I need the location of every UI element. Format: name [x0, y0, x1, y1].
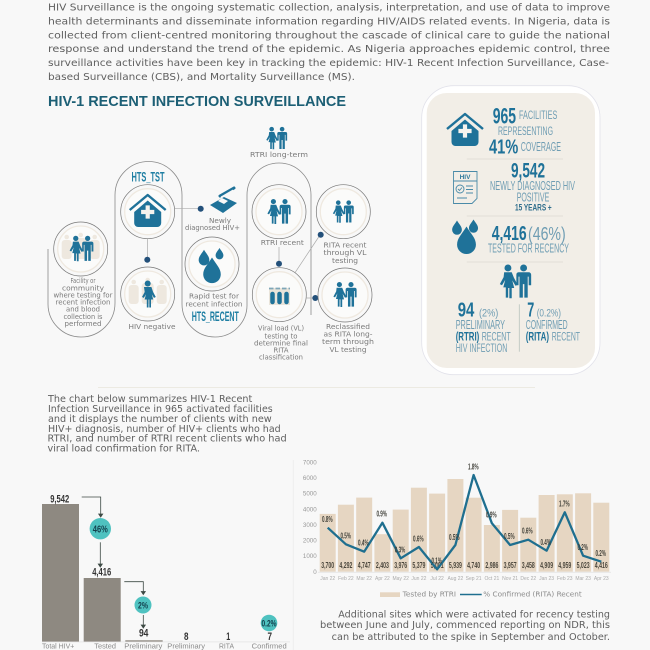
month labels: Apr 22 — [375, 576, 390, 582]
bar values: 4,959 — [558, 561, 572, 570]
stat: preliminary RTRI recent: HIV INFECTION — [456, 341, 507, 355]
bar values: 4,747 — [358, 561, 371, 570]
legend: Tested by RTRI — [402, 590, 456, 598]
y axis labels — [303, 460, 317, 576]
intro text block: collected from client-centred monitoring throughout the cascade of clinical care to guide the national — [48, 30, 610, 42]
percent labels: 0.3% — [395, 546, 405, 555]
intro text block: surveillance activities have been key in tracking the epidemic: HIV-1 Recent Infection Surveillance, Case- — [48, 58, 609, 69]
node: facility or community: recent infection — [56, 298, 110, 307]
node: rapid test: Rapid test for — [189, 292, 239, 300]
month labels: Mar 22 — [356, 576, 372, 582]
icon: couple — [500, 265, 531, 298]
bar values: 1 — [226, 631, 230, 643]
month labels: Jun 22 — [411, 576, 427, 582]
bar values: 5,939 — [449, 561, 462, 570]
stat: preliminary RTRI recent: (2%) — [479, 308, 498, 320]
node: HIV negative: HIV negative — [128, 322, 176, 331]
stat: facilities: REPRESENTING — [498, 124, 553, 138]
label: HTS_RECENT: HTS_RECENT — [192, 308, 239, 324]
y axis labels: 6000 — [303, 475, 317, 482]
label: newly diagnosed HIV+: diagnosed HIV+ — [185, 223, 240, 232]
node: reclassified as RITA long-term: as RITA long- — [324, 330, 373, 338]
bar values — [321, 561, 608, 570]
node: facility or community: Facility or — [70, 276, 96, 285]
y axis labels: 1000 — [303, 553, 317, 560]
bar values — [50, 494, 272, 643]
node: facility or community: and blood — [66, 305, 100, 314]
monthly bars — [320, 479, 609, 572]
intro text block: HIV Surveillance is the ongoing systematic collection, analysis, interpretation, and use of data to improve — [48, 2, 610, 14]
chart description text — [47, 394, 287, 454]
percent labels: 0.6% — [413, 534, 424, 543]
intro text block — [48, 2, 610, 83]
connector dots — [144, 206, 324, 301]
stat: newly diagnosed: 15 YEARS + — [515, 203, 552, 213]
month labels: Jan 23 — [539, 576, 554, 582]
stat: preliminary RTRI recent: PRELIMINARY — [456, 318, 505, 332]
stat: preliminary RTRI recent — [456, 300, 511, 355]
bar values: 4,416 — [595, 561, 608, 570]
month labels: Apr 23 — [594, 576, 609, 582]
stat: preliminary RTRI recent: 94 — [458, 300, 475, 322]
bar values: 2,403 — [376, 561, 389, 570]
percent confirmed trend line — [328, 475, 601, 569]
node: facility or community: community — [62, 284, 105, 292]
percent labels: 0.2% — [577, 543, 588, 552]
percent labels: 0.9% — [376, 509, 387, 518]
node: viral load testing: testing to — [264, 332, 298, 340]
stat: tested for recency: TESTED FOR RECENCY — [488, 241, 569, 256]
bar values: 5,001 — [431, 561, 444, 570]
node: rapid test: recent infection — [186, 300, 242, 308]
stat: newly diagnosed: POSITIVE — [517, 190, 549, 205]
node: RITA recent — [316, 185, 370, 265]
y axis labels: 5000 — [303, 491, 317, 498]
stat: newly diagnosed: 9,542 — [511, 160, 545, 183]
chart description text: HIV+ diagnosis, number of HIV+ clients who had — [48, 424, 281, 435]
stat: preliminary RTRI recent: (RTRI) — [456, 329, 479, 343]
month labels: Jul 22 — [430, 576, 444, 582]
combo chart: tested by RTRI and percent confirmed recent — [303, 460, 611, 598]
percent labels: 0.5% — [340, 532, 351, 541]
bar values: 7 — [267, 631, 272, 643]
y axis labels: 7000 — [303, 460, 317, 466]
bar chart: recency cascade — [42, 494, 290, 650]
arrows — [82, 497, 145, 628]
percentage badges: 0.2% — [262, 618, 277, 630]
stat: tested for recency: (46%) — [528, 224, 566, 244]
stat: facilities: FACILITIES — [519, 108, 557, 122]
stat: confirmed RITA recent: CONFIRMED — [526, 318, 568, 332]
percentage badges: 2% — [138, 600, 148, 612]
percentage badges — [90, 518, 277, 631]
y axis labels: 2000 — [303, 538, 317, 545]
month labels: Aug 22 — [447, 576, 464, 582]
percent labels: 0.9% — [486, 511, 497, 520]
label: newly diagnosed HIV+ — [185, 216, 240, 232]
icon: rapid test kit — [210, 188, 237, 213]
bar values: 8 — [184, 631, 189, 643]
node: viral load testing — [252, 268, 308, 362]
node: RTRI recent: RTRI recent — [261, 238, 304, 247]
node: viral load testing: Viral load (VL) — [258, 324, 304, 332]
connector lines — [148, 209, 320, 298]
month labels: Feb 22 — [338, 576, 354, 582]
percent labels — [322, 463, 606, 566]
percent labels: 1.8% — [468, 463, 479, 472]
bar values: 2,986 — [485, 561, 499, 570]
node: viral load testing: classification — [259, 352, 303, 362]
chart description text: RTRI, and number of RTRI recent clients who had — [48, 433, 287, 444]
icon: blood drops — [452, 220, 478, 254]
node: viral load testing: RITA — [274, 346, 289, 354]
percentage badges: 46% — [93, 524, 108, 536]
note: spike explanation: Additional sites which were activated for recency testing — [338, 610, 610, 620]
stat: newly diagnosed: NEWLY DIAGNOSED HIV — [490, 179, 575, 193]
intro text block: based Surveillance (CBS), and Mortality Surveillance (MS). — [48, 72, 355, 83]
stat: confirmed RITA recent: 7 — [527, 300, 534, 322]
stat: facilities: 41% — [489, 136, 518, 158]
percent labels: 0.4% — [540, 538, 551, 547]
node: reclassified as RITA long-term: Reclassified — [326, 322, 370, 331]
bar values: 4,292 — [339, 561, 353, 570]
node: viral load testing: determine final — [254, 338, 308, 348]
intro text block: response and understand the trend of the epidemic. As Nigeria approaches epidemic control, three — [48, 44, 610, 55]
icon: clinic house — [447, 114, 483, 146]
panel background — [422, 86, 600, 375]
bar values: 3,700 — [321, 561, 335, 570]
stat: facilities — [489, 103, 561, 158]
bar values: 3,976 — [394, 561, 408, 570]
chart description text: The chart below summarizes HIV-1 Recent — [47, 394, 253, 405]
node: rapid test — [185, 237, 242, 308]
node: RITA recent: RITA recent — [324, 240, 367, 250]
heading: HIV-1 recent infection surveillance: HIV-1 RECENT INFECTION SURVEILLANCE — [48, 93, 346, 110]
bar values: 4,740 — [467, 561, 480, 570]
bar values: 5,023 — [577, 561, 590, 570]
node: facility or community — [54, 222, 113, 328]
stat: confirmed RITA recent — [526, 300, 580, 343]
stat: confirmed RITA recent: RECENT — [552, 329, 580, 343]
category labels — [42, 644, 287, 650]
panel: key figures — [422, 86, 600, 375]
bar values: 3,458 — [522, 561, 535, 570]
month labels: Oct 21 — [485, 576, 499, 582]
note: spike explanation: can be attributed to the spike in September and October. — [332, 632, 610, 643]
icon: HIV test document: HIV — [460, 174, 471, 181]
legend — [380, 590, 582, 598]
month labels: Feb 23 — [557, 576, 573, 582]
node: facility or community: where testing for — [54, 290, 113, 300]
chart description text: Infection Surveillance in 965 activated facilities — [48, 404, 273, 415]
stat: confirmed RITA recent: (0.2%) — [537, 308, 561, 320]
percent labels: 0.5% — [449, 533, 460, 542]
stat: confirmed RITA recent: (RITA) — [526, 329, 549, 343]
bar values: 94 — [139, 628, 149, 640]
month labels: Mar 23 — [575, 576, 591, 582]
percent labels: 0.4% — [358, 539, 369, 548]
month labels: Sep 21 — [466, 576, 482, 582]
node: reclassified as RITA long-term — [318, 268, 374, 354]
flow diagram: recency testing pathway — [48, 127, 374, 362]
node: RTRI recent — [252, 185, 306, 247]
capsule outlines — [48, 162, 311, 337]
percent labels: 1.7% — [559, 500, 570, 509]
stat: preliminary RTRI recent: RECENT — [482, 329, 511, 343]
stat: facilities: 965 — [493, 103, 516, 128]
label: HTS_TST: HTS_TST — [132, 169, 165, 185]
bar values: 9,542 — [50, 494, 69, 506]
node: reclassified as RITA long-term: VL testing — [330, 345, 366, 354]
stat: tested for recency — [488, 223, 569, 256]
stat: newly diagnosed — [490, 160, 575, 213]
y axis labels: 0 — [313, 569, 317, 576]
icon: HIV test document — [454, 172, 477, 204]
month labels — [320, 576, 609, 582]
cascade bars — [42, 504, 163, 642]
percent labels: 0.5% — [504, 532, 515, 541]
label: newly diagnosed HIV+: Newly — [209, 216, 232, 225]
intro text block: health determinants and disseminate information regarding HIV/AIDS related events. In Nigeria, data is — [48, 16, 610, 28]
month labels: May 22 — [392, 576, 409, 582]
node: HIV negative — [121, 267, 176, 331]
node: HTS_TST facility — [121, 185, 175, 239]
percent labels: 0.2% — [595, 549, 606, 558]
note: spike explanation: between June and July, commenced reporting on NDR, this — [320, 620, 610, 631]
month labels: Dec 22 — [520, 576, 536, 582]
y axis labels: 4000 — [303, 506, 317, 513]
y axis labels: 3000 — [303, 522, 317, 529]
label: RTRI long-term: RTRI long-term — [250, 150, 308, 159]
chart description text: and it displays the number of clients with new — [48, 414, 272, 425]
node: facility or community: collection is — [64, 312, 103, 321]
bar values: 5,379 — [412, 561, 426, 570]
node: facility or community: performed — [64, 319, 102, 328]
node: RITA recent: testing — [332, 256, 358, 265]
month labels: Nov 21 — [502, 576, 518, 582]
node: reclassified as RITA long-term: term through — [322, 337, 374, 346]
bar values: 4,909 — [540, 561, 553, 570]
percent labels: 0.1% — [431, 557, 442, 566]
chart description text: viral load confirmation for RITA. — [48, 443, 200, 454]
stat: facilities: COVERAGE — [521, 139, 561, 154]
stat: tested for recency: 4,416 — [492, 223, 527, 245]
month labels: Jan 22 — [320, 576, 335, 582]
node: RITA recent: through VL — [324, 248, 366, 257]
bar values: 3,957 — [504, 561, 517, 570]
percent labels: 0.6% — [522, 527, 533, 536]
percent labels: 0.8% — [322, 515, 333, 524]
bar values: 4,416 — [92, 567, 111, 579]
icon: RTRI long-term couple — [266, 127, 287, 149]
note: spike explanation — [320, 610, 610, 643]
legend: % Confirmed (RITA) Recent — [483, 590, 582, 598]
